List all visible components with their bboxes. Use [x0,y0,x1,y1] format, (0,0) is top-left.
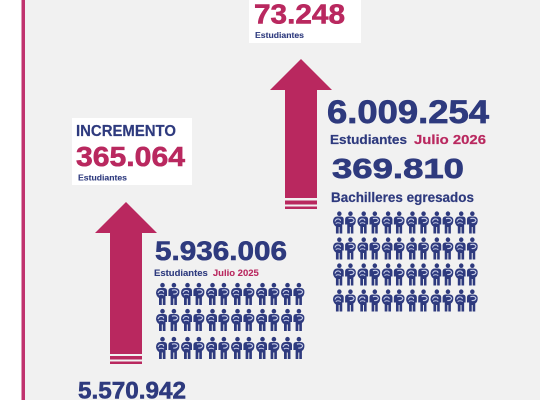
stat: 6.009.254 students: 6.009.254 [327,94,489,130]
arrow: lower [95,202,157,364]
callout: increment 2026 [249,0,361,43]
number: 365.064: 365.064 [76,141,185,172]
stat: 369.810 graduates [331,153,474,205]
stat: 5.936.006 students [154,236,287,279]
heading: incremento: INCREMENTO [76,123,176,140]
left magenta border line [22,0,25,400]
stat: 6.009.254 students [327,94,489,147]
label: estudiantes julio 2025: Estudiantes Julio 2025 [154,268,260,279]
icon grid: students 2025 [156,283,304,359]
arrow: upper [270,59,332,209]
label: estudiantes: Estudiantes [330,132,407,147]
icon grid: graduates 2026 [333,211,478,312]
stat: 5.936.006 students: 5.936.006 [155,236,287,266]
label: bachilleres egresados: Bachilleres egresados [331,190,474,205]
callout: increment 2025 [72,118,192,185]
stat: 369.810 graduates: 369.810 [332,153,464,184]
label: julio 2026: Julio 2026 [414,132,486,147]
label: estudiantes: Estudiantes [255,30,304,40]
label: estudiantes: Estudiantes [78,172,127,182]
